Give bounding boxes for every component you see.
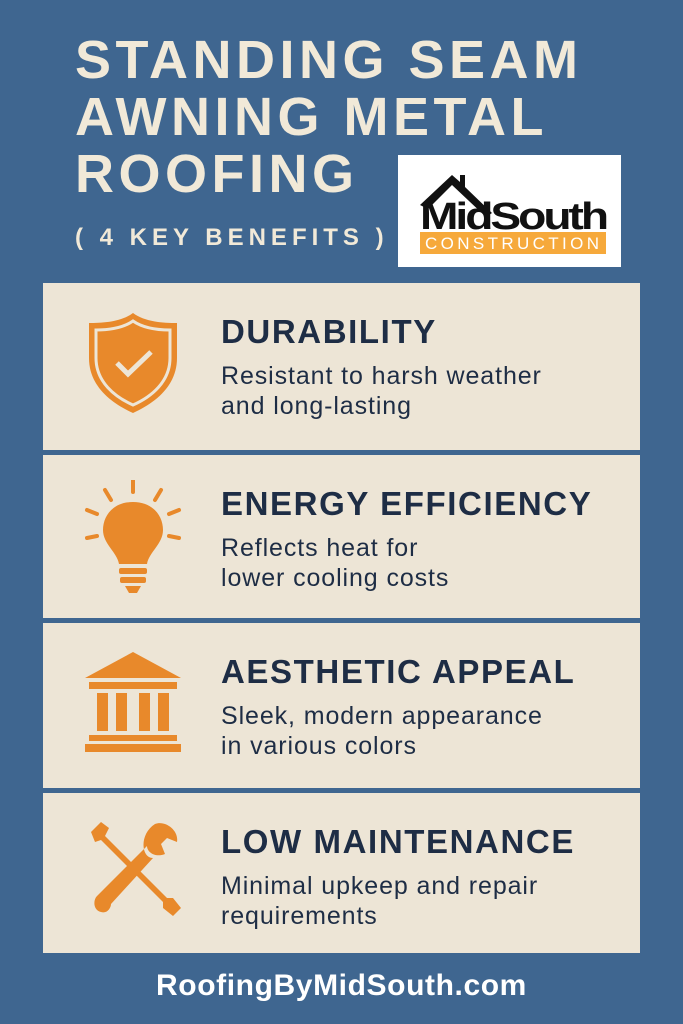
icon: shield — [89, 313, 177, 413]
panel: aesthetic: Sleek, modern appearance — [221, 702, 543, 730]
icon: tools — [91, 822, 181, 916]
panel: durability: Resistant to harsh weather — [221, 362, 542, 390]
title — [75, 30, 583, 204]
panel: maintenance: LOW MAINTENANCE — [221, 823, 575, 860]
panel: energy: lower cooling costs — [221, 564, 449, 592]
icon: bulb — [84, 480, 182, 593]
panel: durability — [43, 283, 640, 450]
panel: aesthetic: AESTHETIC APPEAL — [221, 653, 575, 690]
panel: energy: Reflects heat for — [221, 534, 418, 562]
panel: maintenance — [43, 793, 640, 953]
panel: maintenance: requirements — [221, 902, 378, 930]
title: ROOFING — [75, 144, 358, 204]
logo: MidSouth — [420, 196, 606, 238]
logo: CONSTRUCTION — [425, 234, 601, 253]
panel: durability: and long-lasting — [221, 392, 412, 420]
logo — [398, 155, 621, 267]
title: STANDING SEAM — [75, 30, 583, 90]
footer url: RoofingByMidSouth.com — [156, 969, 527, 1002]
panel: energy: ENERGY EFFICIENCY — [221, 485, 592, 522]
panel: durability: DURABILITY — [221, 313, 437, 350]
icon: building — [85, 652, 181, 752]
panel: maintenance: Minimal upkeep and repair — [221, 872, 538, 900]
title: AWNING METAL — [75, 87, 548, 147]
panel: energy — [43, 455, 640, 618]
panel: aesthetic — [43, 623, 640, 788]
panel: aesthetic: in various colors — [221, 732, 417, 760]
subtitle: ( 4 KEY BENEFITS ) — [75, 224, 389, 251]
